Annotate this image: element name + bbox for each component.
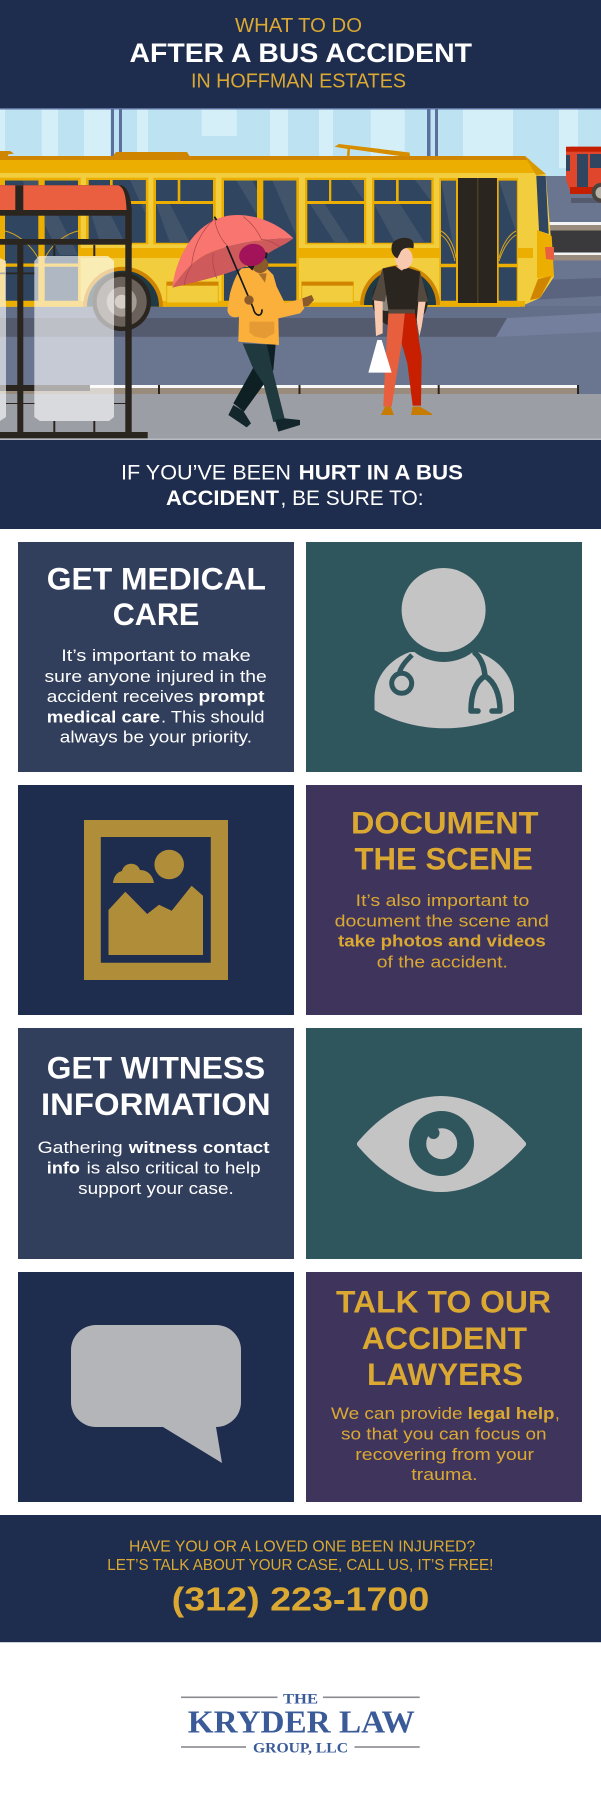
shelter back details	[0, 385, 90, 391]
body text: accident receives	[47, 687, 194, 706]
hands	[244, 295, 254, 305]
heading	[47, 560, 266, 632]
body text: trauma.	[411, 1465, 478, 1484]
header band	[0, 0, 601, 108]
body text: witness contact	[128, 1138, 270, 1157]
subheading band	[0, 440, 601, 529]
body text: of the accident.	[377, 952, 508, 971]
logo: the kryder law group: THE	[283, 1691, 318, 1707]
heading: TALK TO OUR	[336, 1284, 551, 1320]
heading	[351, 805, 538, 877]
shelter roof	[0, 185, 132, 210]
distant barrier	[549, 222, 601, 260]
heading: CARE	[113, 596, 199, 632]
body text: It’s also important to	[356, 891, 529, 910]
shoes	[381, 407, 394, 415]
legs	[233, 344, 276, 412]
body text: so that you can focus on	[341, 1424, 547, 1443]
window frames	[0, 178, 518, 304]
wheel arch left and wheel	[85, 269, 161, 331]
body text: document the scene and	[335, 911, 549, 930]
body text: We can provide	[331, 1404, 463, 1423]
body text: Gathering	[38, 1138, 123, 1157]
umbrella handle	[214, 217, 262, 315]
arms	[374, 300, 383, 336]
body text	[38, 1138, 270, 1198]
umbrella canopy	[172, 215, 293, 288]
heading: THE SCENE	[354, 841, 533, 877]
panel: photo icon	[18, 785, 294, 1015]
body text: legal help	[468, 1404, 555, 1423]
footer call to action	[0, 1515, 601, 1643]
red bus in background	[566, 147, 601, 203]
subheading band: HURT IN A BUS	[299, 462, 463, 485]
heading: DOCUMENT	[351, 805, 538, 841]
head and hat	[252, 257, 268, 273]
body text	[335, 891, 549, 971]
shirt and sleeves	[372, 268, 388, 302]
body text	[331, 1404, 560, 1484]
body text: sure anyone injured in the	[44, 667, 267, 686]
subheading band: IF YOU’VE BEEN	[121, 462, 291, 485]
logo: the kryder law group	[181, 1691, 420, 1757]
heading: GET MEDICAL	[47, 560, 266, 596]
side panels	[167, 282, 353, 303]
hoodie	[227, 267, 304, 345]
body text: is also critical to help	[87, 1158, 261, 1177]
head	[395, 248, 413, 269]
pocket	[249, 322, 274, 338]
body text: always be your priority.	[60, 728, 252, 747]
title line: after a bus accident: AFTER A BUS ACCIDENT	[130, 38, 473, 68]
heading	[41, 1050, 271, 1122]
body text: info	[47, 1158, 80, 1177]
title line: in hoffman estates: IN HOFFMAN ESTATES	[191, 70, 406, 92]
body text: ,	[555, 1404, 560, 1423]
body text: medical care	[47, 708, 160, 727]
shopping bag	[368, 340, 392, 373]
body text: It’s important to make	[61, 646, 251, 665]
panel: get medical care	[18, 542, 294, 772]
icon: speech bubble	[71, 1325, 241, 1463]
logo: the kryder law group: GROUP, LLC	[253, 1741, 348, 1757]
window glass	[5, 180, 517, 301]
body text: take photos and videos	[338, 931, 546, 950]
curb	[0, 385, 579, 394]
wheel arch right and wheel	[362, 267, 438, 328]
footer call to action: LET’S TALK ABOUT YOUR CASE, CALL US, IT’S FREE!	[107, 1557, 493, 1574]
heading: LAWYERS	[367, 1356, 523, 1392]
subheading band: ACCIDENT	[166, 487, 279, 510]
pavement	[0, 394, 601, 440]
icon: framed picture	[84, 820, 228, 980]
body text: recovering from your	[355, 1445, 534, 1464]
heading	[336, 1284, 551, 1392]
panel: talk to our accident lawyers	[306, 1272, 582, 1502]
body text: . This should	[161, 708, 264, 727]
body text	[44, 646, 267, 747]
door	[458, 178, 497, 303]
illustration: street scene with bus and pedestrians	[0, 108, 601, 440]
panel: get witness information	[18, 1028, 294, 1259]
sky and skyline	[0, 108, 601, 178]
heading: GET WITNESS	[47, 1050, 265, 1086]
panel: eye icon	[306, 1028, 582, 1259]
heading: ACCIDENT	[362, 1320, 527, 1356]
roof details and trolley pole	[0, 144, 410, 156]
road	[0, 176, 601, 394]
call to action text: HAVE YOU OR A LOVED ONE BEEN INJURED?	[129, 1538, 476, 1555]
icon: eye	[360, 1099, 523, 1189]
panel: document the scene	[306, 785, 582, 1015]
shelter glass panels	[34, 256, 114, 421]
shelter frame	[0, 210, 132, 216]
man with shopping bag	[368, 238, 432, 415]
logo: the kryder law group: KRYDER LAW	[188, 1704, 415, 1740]
icon: doctor with stethoscope	[374, 568, 514, 728]
shoes	[228, 405, 251, 427]
phone number: (312) 223-1700	[172, 1581, 429, 1618]
yellow bus	[0, 144, 554, 331]
pants	[383, 313, 405, 407]
person with umbrella	[172, 215, 314, 432]
body text: prompt	[198, 687, 265, 706]
door arches	[5, 231, 516, 261]
heading: INFORMATION	[41, 1086, 271, 1122]
panel: doctor icon	[306, 542, 582, 772]
title line: what to do: WHAT TO DO	[235, 15, 362, 37]
panel: speech bubble icon	[18, 1272, 294, 1502]
neck	[397, 263, 406, 273]
subheading band: , BE SURE TO:	[280, 487, 424, 510]
bus shelter	[0, 185, 148, 438]
body text: support your case.	[78, 1179, 234, 1198]
